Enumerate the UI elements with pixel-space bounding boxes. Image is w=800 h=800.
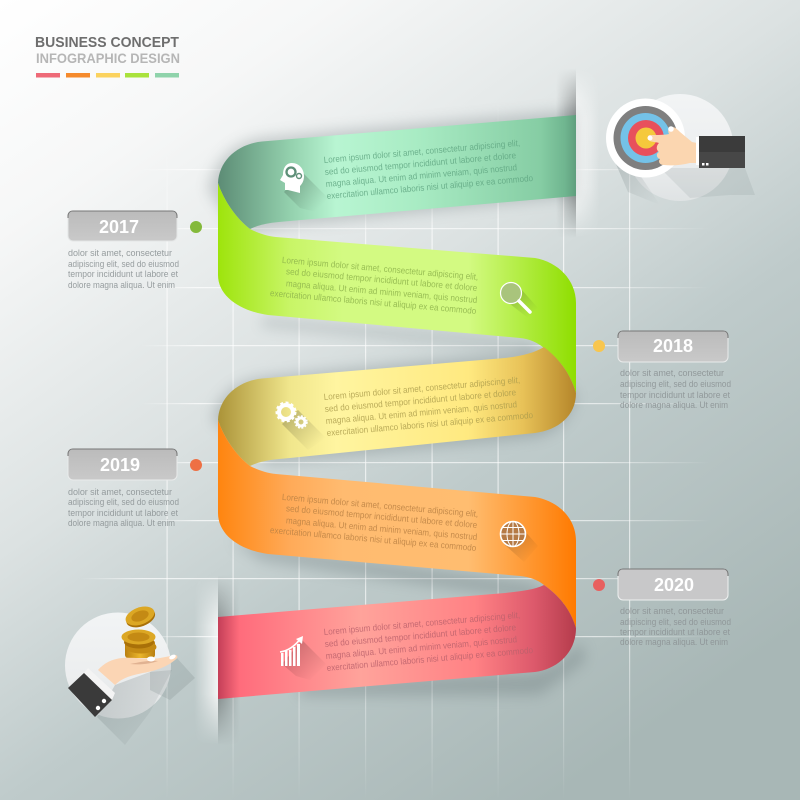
shirt cuff bbox=[84, 668, 115, 700]
band shape bbox=[218, 420, 576, 628]
description: dolore magna aliqua. Ut enim bbox=[620, 637, 728, 647]
icon: head with gears bbox=[280, 163, 328, 212]
band shape bbox=[218, 585, 576, 699]
description bbox=[620, 368, 731, 410]
ribbon 2: lime bbox=[218, 183, 576, 393]
shirt cuff bbox=[696, 137, 699, 165]
long shadows bbox=[150, 657, 195, 700]
band shape bbox=[218, 347, 576, 466]
ribbon 5: red bbox=[218, 585, 576, 699]
text block: exercitation ullamco laboris nisi ut aliquip ex ea commodo bbox=[270, 525, 477, 553]
text block: Lorem ipsum dolor sit amet, consectetur adipiscing elit, bbox=[323, 138, 520, 165]
connector dot bbox=[190, 221, 202, 233]
icon: globe bbox=[500, 522, 538, 562]
timeline marker 2017 bbox=[68, 211, 202, 290]
hand bbox=[98, 655, 177, 685]
heading line 1: BUSINESS CONCEPT bbox=[35, 34, 179, 51]
icon: growth chart bbox=[280, 636, 326, 680]
description: adipiscing elit, sed do eiusmod bbox=[620, 617, 731, 627]
icon: hand holding coins bbox=[65, 603, 195, 745]
text block: magna aliqua. Ut enim ad minim veniam, quis nostrud bbox=[325, 162, 517, 189]
text block: magna aliqua. Ut enim ad minim veniam, quis nostrud bbox=[286, 515, 478, 542]
text block: exercitation ullamco laboris nisi ut aliquip ex ea commodo bbox=[326, 645, 533, 673]
text block bbox=[270, 492, 479, 553]
jacket sleeve bbox=[68, 673, 112, 717]
text block: exercitation ullamco laboris nisi ut aliquip ex ea commodo bbox=[326, 410, 533, 438]
timeline marker 2019 bbox=[68, 449, 202, 528]
text block: Lorem ipsum dolor sit amet, consectetur adipiscing elit, bbox=[323, 610, 520, 637]
description: dolore magna aliqua. Ut enim bbox=[68, 280, 175, 290]
hand bbox=[648, 127, 697, 165]
long shadows bbox=[612, 155, 660, 205]
text block: Lorem ipsum dolor sit amet, consectetur adipiscing elit, bbox=[282, 492, 479, 519]
description: tempor incididunt ut labore et bbox=[620, 390, 730, 400]
target bbox=[606, 98, 685, 178]
year label: 2018 bbox=[653, 336, 693, 356]
colour key bars bbox=[36, 73, 179, 78]
description: dolor sit amet, consectetur bbox=[68, 248, 172, 258]
description bbox=[68, 248, 179, 290]
description: adipiscing elit, sed do eiusmod bbox=[620, 379, 731, 389]
text block bbox=[323, 138, 533, 201]
text block bbox=[323, 375, 533, 438]
text block: magna aliqua. Ut enim ad minim veniam, quis nostrud bbox=[325, 634, 517, 661]
description bbox=[68, 487, 179, 528]
text block: sed do eiusmod tempor incididunt ut labore et dolore bbox=[324, 150, 516, 177]
description: tempor incididunt ut labore et bbox=[620, 627, 730, 637]
timeline marker 2018 bbox=[593, 331, 731, 410]
description: tempor incididunt ut labore et bbox=[68, 508, 178, 518]
timeline marker 2020 bbox=[593, 569, 731, 647]
jacket sleeve bbox=[699, 136, 745, 152]
text block: sed do eiusmod tempor incididunt ut labore et dolore bbox=[324, 387, 516, 414]
text block: exercitation ullamco laboris nisi ut aliquip ex ea commodo bbox=[326, 173, 533, 201]
band shape bbox=[218, 183, 576, 393]
description: adipiscing elit, sed do eiusmod bbox=[68, 259, 179, 269]
ribbon 4: orange bbox=[218, 420, 576, 628]
description: dolor sit amet, consectetur bbox=[620, 606, 724, 616]
icon: gears bbox=[276, 402, 326, 450]
ribbon shadows bbox=[208, 110, 586, 696]
heading line 2: INFOGRAPHIC DESIGN bbox=[36, 50, 180, 66]
coin stack bbox=[122, 630, 156, 658]
ribbon 1: mint bbox=[218, 115, 576, 229]
description: dolor sit amet, consectetur bbox=[620, 368, 724, 378]
description: tempor incididunt ut labore et bbox=[68, 269, 178, 279]
text block: Lorem ipsum dolor sit amet, consectetur adipiscing elit, bbox=[282, 255, 479, 282]
title bbox=[35, 34, 180, 66]
year label: 2020 bbox=[654, 575, 694, 595]
fold shadows bbox=[194, 68, 600, 745]
icon: magnifier bbox=[500, 282, 538, 318]
backing circle bbox=[65, 612, 171, 718]
text block: sed do eiusmod tempor incididunt ut labore et dolore bbox=[324, 622, 516, 649]
description bbox=[620, 606, 731, 647]
text block: sed do eiusmod tempor incididunt ut labore et dolore bbox=[286, 266, 478, 293]
text block bbox=[323, 610, 533, 673]
flying coin bbox=[123, 603, 158, 631]
text block bbox=[270, 255, 479, 316]
icon: hand pressing target bbox=[606, 94, 755, 205]
background grid bbox=[80, 100, 710, 800]
description: dolore magna aliqua. Ut enim bbox=[620, 400, 728, 410]
text block: sed do eiusmod tempor incididunt ut labore et dolore bbox=[286, 503, 478, 530]
description: dolore magna aliqua. Ut enim bbox=[68, 518, 175, 528]
backing circle bbox=[626, 94, 734, 201]
description: adipiscing elit, sed do eiusmod bbox=[68, 497, 179, 507]
ribbon 3: yellow bbox=[218, 347, 576, 466]
band shape bbox=[218, 115, 576, 229]
year label: 2019 bbox=[100, 455, 140, 475]
description: dolor sit amet, consectetur bbox=[68, 487, 172, 497]
text block: Lorem ipsum dolor sit amet, consectetur adipiscing elit, bbox=[323, 375, 520, 402]
connector dot bbox=[190, 459, 202, 471]
text block: exercitation ullamco laboris nisi ut aliquip ex ea commodo bbox=[270, 288, 477, 316]
text block: magna aliqua. Ut enim ad minim veniam, quis nostrud bbox=[325, 399, 517, 426]
text block: magna aliqua. Ut enim ad minim veniam, quis nostrud bbox=[286, 278, 478, 305]
year label: 2017 bbox=[99, 217, 139, 237]
connector dot bbox=[593, 340, 605, 352]
connector dot bbox=[593, 579, 605, 591]
